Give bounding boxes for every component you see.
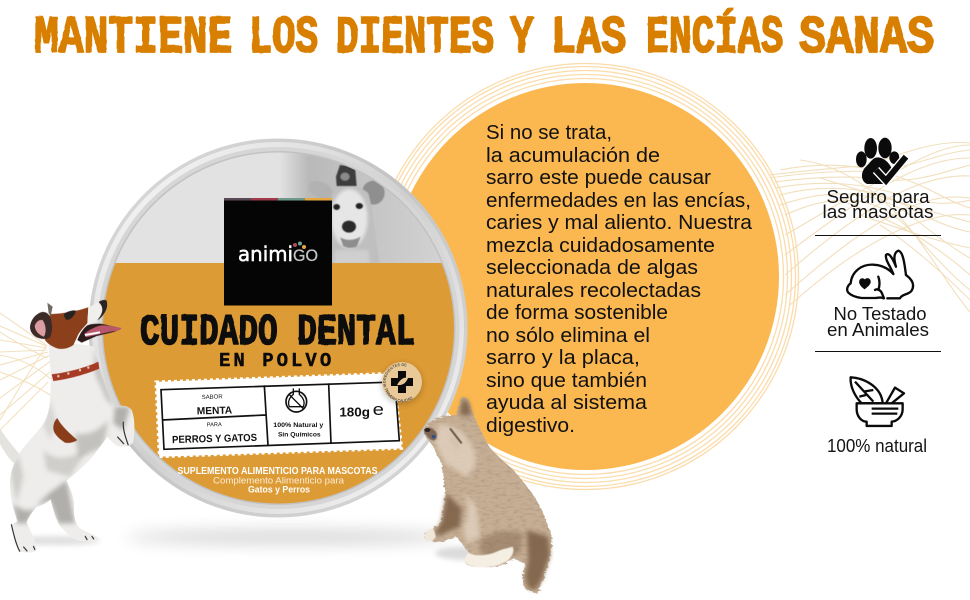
quality seal [378,361,425,407]
cat face mask [424,428,437,440]
natural cell [273,388,324,438]
title: LAS [551,9,626,69]
cat nose [424,428,430,432]
body paragraph: la acumulación de [486,145,660,167]
weight cell: e [373,400,384,419]
cat white tail fluff [464,547,513,567]
dog ear [30,312,52,339]
divider [815,235,941,236]
info label [156,373,402,457]
weight cell: 180g [339,405,370,420]
dog mouth [77,324,122,343]
body paragraph: no sólo elimina el [486,325,650,347]
logo block: animi [238,242,293,266]
tin footer text: Gatos y Perros [248,484,310,496]
dog ear inner [35,320,46,337]
tin footer text: SUPLEMENTO ALIMENTICIO PARA MASCOTAS [178,466,378,477]
cat fur highlight [435,425,480,543]
body paragraph: sarro y la placa, [486,347,640,369]
tin footer text: Complemento Alimenticio para [213,476,345,486]
title: DIENTES [336,8,494,68]
dog nose and jaw [97,300,107,320]
dog head [45,307,88,349]
cat fur shading [433,398,550,590]
ground shadow [125,530,455,544]
dog snout [87,300,107,325]
title: ENCÍAS [646,7,783,68]
dog ear back tip [47,303,53,316]
decorative waves: right [770,142,970,312]
title: LOS [249,7,319,68]
dog eye [64,310,76,320]
cat body [424,397,552,593]
cat eye [432,435,435,438]
title: Y [510,8,534,68]
decorative rings around circle [372,64,798,490]
dog tongue [84,325,122,337]
dog teeth [85,332,100,335]
badge: 100% natural [827,377,927,456]
product name: CUIDADO DENTAL [140,308,415,358]
quality seal: PRIMERA CALIDAD [384,388,412,402]
divider [815,351,941,352]
tin footer text [178,466,378,496]
logo block: GO [293,247,318,265]
body paragraph: Si no se trata, [486,122,612,144]
body paragraph: caries y mal aliento. Nuestra [486,212,753,234]
product subtitle: EN POLVO [219,350,334,372]
weight cell [339,400,384,420]
cat illustration [424,397,552,593]
orange text circle [392,83,779,470]
title: MANTIENE [34,9,232,69]
logo block [224,198,332,306]
dog body shading [10,347,130,523]
title: SANAS [799,8,934,68]
quality seal: INGREDIENTES DE [383,363,407,388]
body paragraph: enfermedades en las encías, [486,190,751,212]
cat shadow [435,547,498,560]
dog collar [52,362,99,381]
body paragraph: seleccionada de algas [486,257,698,279]
body paragraph: naturales recolectadas [486,280,701,302]
body paragraph [486,122,753,437]
label: 100% natural [827,436,927,456]
lid colour band [100,263,460,523]
label: No Testado [834,304,926,324]
body paragraph: sino que también [486,370,647,392]
body paragraph: mezcla cuidadosamente [486,235,715,257]
dog side patch [53,418,77,443]
badge: safe for pets: las mascotas [822,202,934,222]
dog collar studs [58,367,88,376]
cat cheek stripes [450,428,462,443]
body paragraph: de forma sostenible [486,302,668,324]
label: Seguro para [826,187,931,207]
flavour cell: MENTA [197,405,233,417]
natural cell: 100% Natural y [273,422,324,429]
dog and kitten photo [314,164,385,263]
product tin [88,138,468,518]
decorative waves: left [0,313,52,430]
icon: rabbit [847,251,913,298]
icon: leaf and mortar [851,377,904,426]
dog body [10,343,134,553]
flavour cell: SABOR [202,394,223,401]
tin lid photo area [100,150,460,523]
cat paw [424,528,436,541]
natural cell: Sin Químicos [278,431,321,438]
dog paw and foot outlines [11,422,128,552]
body paragraph: digestivo. [486,415,575,437]
body paragraph: sarro este puede causar [486,167,711,189]
flavour cell: PARA [207,422,222,429]
badge: not tested on animals [827,251,929,340]
dog shadow [13,536,100,545]
tin rim [88,138,468,518]
badge: safe for pets [822,138,934,222]
dog tail [0,428,19,463]
title [34,7,934,69]
badge: not tested on animals: en Animales [827,320,929,340]
flavour cell [171,394,257,446]
flavour cell: PERROS Y GATOS [172,433,257,446]
dog illustration [0,300,134,553]
body paragraph: ayuda al sistema [486,392,648,414]
icon: paw with check [856,138,906,184]
